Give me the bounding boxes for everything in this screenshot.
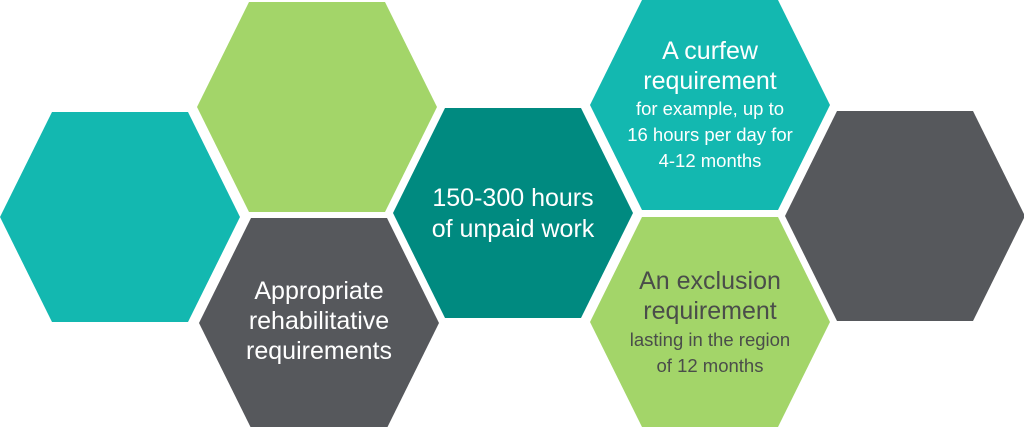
hexagon: unpaid work	[393, 108, 633, 318]
hexagon: curfew requirement: A curfew	[662, 37, 759, 65]
hexagon: curfew requirement: 16 hours per day for	[627, 124, 793, 145]
hexagon: exclusion requirement	[590, 217, 830, 427]
hexagon: curfew requirement: 4-12 months	[659, 150, 761, 171]
hexagon: curfew requirement	[590, 0, 830, 210]
hexagon: top green	[197, 2, 437, 212]
hexagon: exclusion requirement: of 12 months	[657, 355, 763, 376]
hexagon: rehabilitative requirements: requirements	[246, 337, 392, 365]
hexagon: rehabilitative requirements: Appropriate	[254, 277, 384, 305]
hexagon: rehabilitative requirements	[199, 218, 439, 427]
hexagon: curfew requirement: requirement	[643, 67, 777, 95]
hexagon: rehabilitative requirements: rehabilitative	[249, 307, 389, 335]
hexagon: exclusion requirement: requirement	[643, 297, 777, 325]
hexagon: right grey	[785, 111, 1024, 321]
hexagon: exclusion requirement: lasting in the region	[630, 329, 790, 350]
hexagon: exclusion requirement: An exclusion	[639, 267, 781, 295]
hexagon: unpaid work: 150-300 hours	[432, 184, 594, 212]
hexagon: left teal	[0, 112, 240, 322]
hexagon: curfew requirement: for example, up to	[636, 98, 784, 119]
hexagon: unpaid work: of unpaid work	[432, 215, 595, 243]
